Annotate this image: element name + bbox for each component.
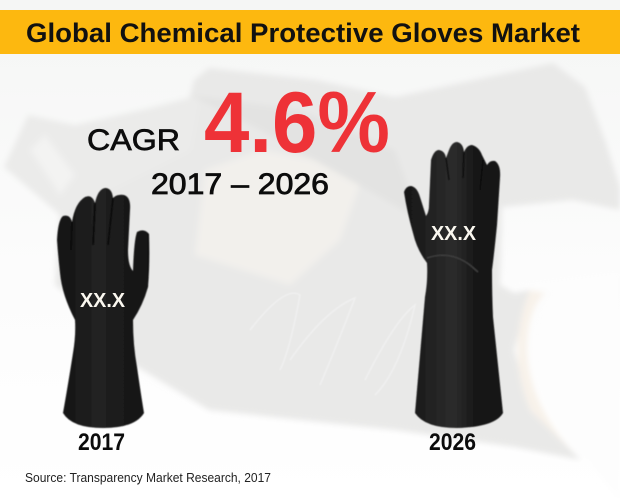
white gap between hands [500, 270, 620, 500]
title: Global Chemical Protective Gloves Market [26, 18, 580, 48]
CAGR label: CAGR [87, 124, 180, 157]
faded darker fingers [190, 95, 420, 220]
finger grooves [446, 152, 483, 190]
year 2017: 2017 [78, 429, 125, 456]
palm creases [427, 255, 478, 272]
finger grooves [71, 198, 113, 250]
title band [0, 10, 620, 54]
year 2026: 2026 [429, 429, 476, 456]
glove 2026 [404, 142, 503, 428]
faded bottle [4, 95, 200, 215]
faded glove cuff [518, 290, 581, 460]
CAGR value: 4.6% [204, 75, 390, 171]
glove 2026 value: XX.X [431, 223, 477, 245]
glove 2017 [57, 188, 149, 428]
faded crease highlights [250, 293, 415, 395]
faded centre label [195, 150, 365, 285]
source: Source: Transparency Market Research, 2017 [25, 471, 271, 485]
faded upper glove and hand [55, 63, 620, 460]
period: 2017 – 2026 [151, 168, 329, 201]
glove 2017 value: XX.X [80, 290, 126, 312]
faded bottle label [30, 135, 75, 195]
